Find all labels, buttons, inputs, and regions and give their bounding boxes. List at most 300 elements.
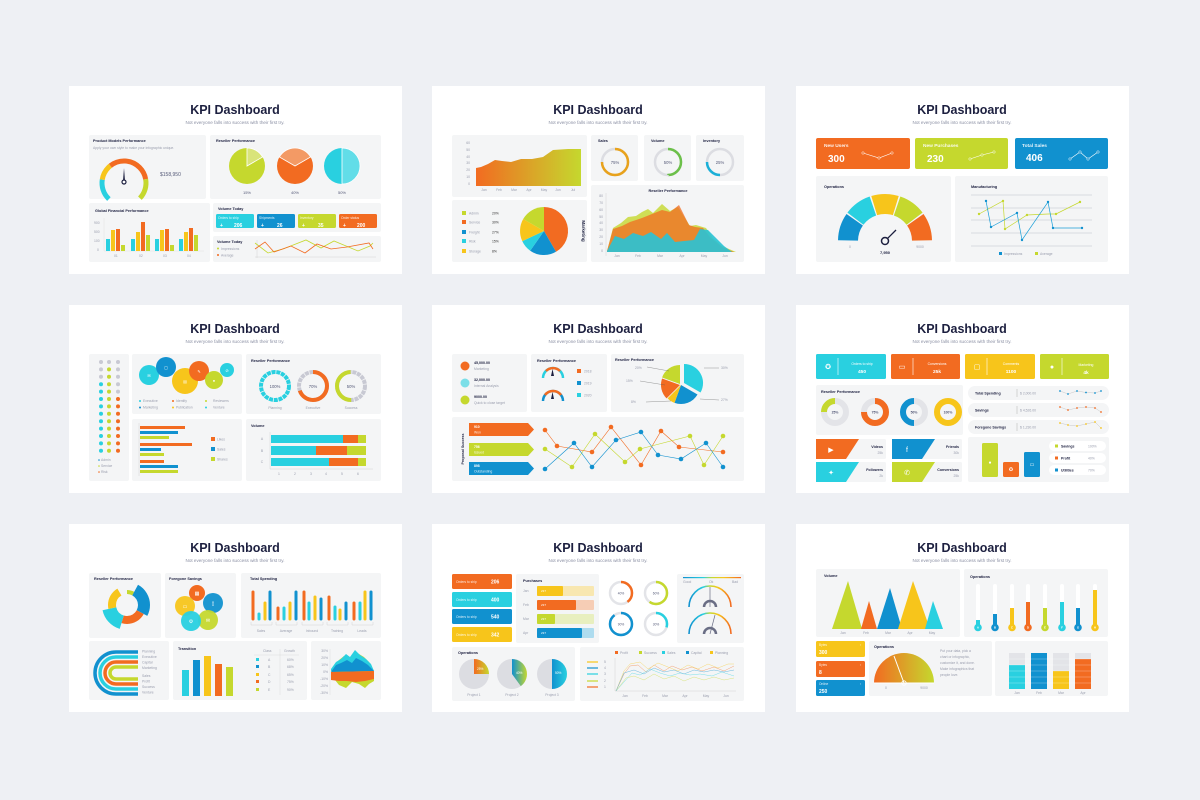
panel: horizontal bars: Shares: [217, 458, 228, 462]
panel: reseller performance donuts: 50%: [911, 410, 917, 414]
panel: reseller performance area chart: 40: [599, 221, 603, 225]
panel: reseller gauges: 2019: [584, 382, 592, 386]
panel: volume donut: 50%: [664, 160, 672, 165]
panel: savings bars and legend: 40%: [1088, 456, 1095, 460]
panel: good/bad gauges: Bad: [732, 580, 738, 584]
social tiles: 25k: [878, 451, 883, 455]
panel: volume today boxes: Shipments: [259, 216, 275, 220]
social tiles: 30k: [954, 451, 959, 455]
order cards: 206: [491, 580, 500, 586]
panel: savings bars and legend: ✪: [1009, 467, 1013, 473]
order cards: Orders to ship: [456, 580, 477, 584]
panel: foregone savings bubbles: ✉: [206, 618, 210, 624]
subtitle: Not everyone falls into success with their first try.: [186, 558, 284, 563]
panel: foregone savings bubbles: ▭: [183, 604, 188, 610]
panel: volume stacked bars: A: [261, 437, 264, 441]
panel: reseller performance rings: Executive: [306, 406, 320, 410]
slide 6: social KPI cards: [796, 305, 1129, 493]
panel: operations gauge: Make infographics that: [940, 667, 974, 671]
panel: monthly stacked bars: [995, 641, 1108, 696]
slide 5: icons, gauges, pie, proposal success: [432, 305, 765, 493]
panel: area chart: May: [541, 188, 548, 192]
panel: rainbow bands: [89, 641, 169, 700]
panel: purchases: Jan: [523, 589, 529, 593]
panel: volume triangles: Jan: [840, 631, 846, 635]
panel: volume today boxes: 200: [357, 223, 366, 229]
panel: reseller performance donuts: 75%: [872, 410, 878, 414]
panel: area chart: Jan: [481, 188, 487, 192]
panel: proposal success: 756: [474, 445, 480, 449]
panel: volume triangles: Feb: [863, 631, 869, 635]
panel: multi-line chart: 2: [604, 679, 606, 683]
panel: reseller performance area chart: May: [701, 254, 708, 258]
panel: proposal success: Proposal Success: [461, 434, 465, 464]
spending pills: Savings: [975, 408, 989, 412]
slide 4: dots, bubbles, rings, bars: [69, 305, 402, 493]
panel: purchases: 237: [541, 631, 546, 635]
panel: purchases: Feb: [523, 603, 529, 607]
panel: proposal success: Won: [474, 430, 481, 434]
panel: volume today boxes: 206: [234, 223, 243, 229]
panel: purchases: Mar: [523, 617, 530, 621]
panel: marketing pie: 8%: [492, 250, 497, 254]
panel: volume triangles: Volume: [824, 574, 837, 578]
panel: reseller performance pies: Reseller Performance: [216, 139, 255, 143]
panel: bubbles: ✎: [197, 369, 201, 374]
slide 8: order cards, purchases, donuts, gauges, operations: [432, 524, 765, 712]
panel: transition bars and table: 60%: [287, 658, 294, 662]
panel: marketing pie: Marketing: [581, 220, 586, 242]
subtitle: Not everyone falls into success with their first try.: [549, 120, 647, 125]
donuts: 90%: [618, 622, 624, 626]
spending pills: $ 2,000.00: [1020, 392, 1036, 396]
panel: operations gauge: Put your data, pick a: [940, 649, 971, 653]
panel: proposal success: 898: [474, 464, 480, 468]
panel: transition bars and table: C: [268, 673, 271, 677]
panel: transition bars and table: 65%: [287, 673, 294, 677]
panel: reseller performance rings: Reseller Performance: [251, 359, 290, 363]
social tiles: Followers: [866, 468, 883, 472]
panel: rainbow bands: Venture: [142, 690, 154, 694]
panel: operations thermometers: H: [1094, 626, 1096, 630]
panel: global financial performance bars: 04: [187, 254, 191, 258]
panel: reseller performance area chart: 60: [599, 208, 603, 212]
subtitle: Not everyone falls into success with their first try.: [549, 558, 647, 563]
panel: bubbles: Reviewers: [213, 399, 229, 403]
panel: reseller performance rings: Success: [345, 406, 358, 410]
panel: total spending bars: Sales: [257, 629, 266, 633]
card: new users: [816, 138, 910, 169]
panel: reseller performance area chart: Jan: [614, 254, 620, 258]
subtitle: Not everyone falls into success with their first try.: [186, 120, 284, 125]
panel: reseller performance area chart: 10: [599, 242, 603, 246]
card: total sales: Total Sales: [1022, 143, 1047, 149]
panel: proposal success: Outstanding: [474, 470, 492, 474]
panel: area chart: Jun: [555, 188, 561, 192]
panel: operations pies: Project 2: [505, 693, 519, 697]
panel: operations pies: Project 3: [545, 693, 559, 697]
side cards: [816, 641, 865, 696]
panel: reseller performance rings: 70%: [309, 384, 317, 389]
panel: volume stacked bars: 1: [278, 472, 280, 476]
panel: reseller performance donuts: 100%: [944, 410, 952, 414]
side cards: 250: [819, 689, 828, 695]
panel: reseller performance area chart: Jun: [722, 254, 728, 258]
panel: sales donut: 75%: [611, 160, 619, 165]
donuts: 30%: [653, 622, 659, 626]
social tiles: [816, 439, 962, 482]
social tiles: Friends: [946, 445, 959, 449]
subtitle: Not everyone falls into success with their first try.: [549, 339, 647, 344]
social tiles: 25k: [954, 474, 959, 478]
panel: volume triangles: Apr: [907, 631, 914, 635]
panel: bubbles: Identify: [176, 399, 187, 403]
social tiles: ✦: [828, 469, 834, 477]
panel: volume today boxes: 35: [318, 223, 324, 229]
panel: volume today boxes: 26: [277, 223, 283, 229]
panel: volume stacked bars: 5: [341, 472, 343, 476]
panel: multi-line chart: Feb: [642, 694, 648, 698]
panel: volume today boxes: +: [302, 223, 305, 229]
spending pills: [968, 386, 1109, 434]
panel: rainbow bands: Planning: [142, 650, 155, 654]
panel: volume stacked bars: C: [261, 460, 264, 464]
panel: operations gauge: 0: [885, 686, 887, 690]
panel: rainbow bands: Capital: [142, 660, 153, 664]
panel: operations gauge: Operations: [824, 185, 844, 189]
panel: area chart: Apr: [526, 188, 533, 192]
panel: volume today boxes: +: [220, 223, 223, 229]
panel: volume today boxes: +: [261, 223, 264, 229]
spending pills: $ 4,526.00: [1020, 408, 1036, 412]
subtitle: Not everyone falls into success with their first try.: [913, 120, 1011, 125]
cards row: Comments: [1003, 362, 1019, 366]
panel: marketing pie: 27%: [492, 230, 499, 234]
panel: global financial performance bars: 01: [114, 254, 118, 258]
donuts: 40%: [618, 592, 624, 596]
panel: multi-line chart: Apr: [682, 694, 689, 698]
panel: horizontal bars: Likes: [217, 438, 225, 442]
social tiles: Conversions: [937, 468, 959, 472]
panel: transition bars and table: D: [268, 680, 271, 684]
panel: reseller pie: 15%: [626, 379, 633, 383]
panel: bubbles: Executive: [143, 399, 158, 403]
panel: marketing pie: 15%: [492, 240, 499, 244]
panel: marketing pie: 20%: [492, 212, 499, 216]
panel: reseller performance rings: Planning: [268, 406, 282, 410]
panel: operations pies: 50%: [555, 671, 562, 675]
panel: area chart: Feb: [496, 188, 502, 192]
panel: reseller performance pies: 50%: [338, 190, 346, 195]
panel: multi-line chart: May: [703, 694, 710, 698]
panel: reseller gauges: [531, 354, 607, 412]
panel: sales donut: [591, 135, 638, 181]
panel: operations gauge: 9000: [920, 686, 928, 690]
slide 1: gauges, pies, bars: [69, 86, 402, 274]
panel: reseller performance area chart: 70: [599, 201, 603, 205]
panel: total spending bars: Total Spending: [250, 577, 278, 581]
panel: inventory donut: Inventory: [703, 139, 721, 143]
cards row: ▢: [974, 364, 980, 371]
panel: volume today boxes: Order status: [341, 216, 359, 220]
panel: volume donut: Volume: [651, 139, 664, 143]
panel: area chart: Mar: [511, 188, 518, 192]
panel: operations thermometers: D: [1027, 626, 1030, 630]
panel: multi-line chart: Sales: [667, 651, 676, 655]
panel: operations pies: Project 1: [467, 693, 481, 697]
spending pills: Total Spending: [975, 392, 1001, 396]
panel: multi-line chart: Planning: [715, 651, 728, 655]
panel: bubbles: ▤: [183, 379, 187, 384]
panel: foregone savings bubbles: ▦: [195, 591, 200, 597]
side cards: 8: [819, 670, 822, 676]
panel: operations thermometers: [964, 569, 1108, 637]
title: KPI Dashboard: [190, 541, 280, 555]
panel: area chart: 50: [466, 148, 470, 152]
panel: manufacturing line chart: Average: [1040, 252, 1053, 256]
panel: product models performance: Apply your own style to make your infographic unique.: [93, 146, 174, 150]
panel: volume stacked bars: 6: [357, 472, 359, 476]
panel: operations thermometers: C: [1011, 626, 1014, 630]
panel: area chart: 10: [466, 175, 470, 179]
panel: area chart: Jul: [571, 188, 575, 192]
panel: multi-line chart: Jun: [723, 694, 729, 698]
cards row: 1100: [1006, 369, 1017, 375]
panel: global financial performance bars: 0: [97, 248, 99, 252]
panel: reseller pie: 8%: [631, 400, 636, 404]
panel: global financial performance bars: 500: [94, 230, 100, 234]
panel: operations thermometers: Operations: [970, 575, 990, 579]
cards row: ▭: [899, 364, 905, 371]
panel: reseller performance area chart: [591, 185, 744, 262]
card: total sales: 406: [1026, 153, 1043, 164]
panel: inventory donut: [696, 135, 744, 181]
panel: rainbow bands: Executive: [142, 655, 157, 659]
panel: key figures: 32,000.00: [474, 378, 490, 382]
panel: growth area: -10%: [320, 677, 328, 681]
title: KPI Dashboard: [190, 103, 280, 117]
panel: growth area: 30%: [321, 649, 328, 653]
title: KPI Dashboard: [553, 103, 643, 117]
panel: reseller performance pies: [210, 135, 381, 199]
panel: foregone savings bubbles: ▯: [212, 601, 215, 607]
title: KPI Dashboard: [553, 322, 643, 336]
panel: growth area: -30%: [320, 691, 328, 695]
panel: transition bars and table: Transition: [178, 647, 197, 651]
panel: reseller pie: [611, 354, 744, 412]
subtitle: Not everyone falls into success with their first try.: [913, 339, 1011, 344]
social tiles: f: [906, 447, 908, 454]
cards row: 25k: [933, 369, 941, 375]
panel: volume today line chart: Average: [221, 254, 234, 258]
panel: product models performance: $158,950: [160, 172, 181, 178]
panel: purchases: Apr: [523, 631, 529, 635]
title: KPI Dashboard: [917, 103, 1007, 117]
social tiles: ✆: [904, 469, 910, 477]
panel: growth area: -20%: [320, 684, 328, 688]
slide 2: area charts, donuts, pie: [432, 86, 765, 274]
panel: bubbles: ▢: [164, 365, 168, 370]
panel: operations gauge: 0: [849, 245, 851, 249]
panel: purchases: 237: [541, 603, 546, 607]
panel: total spending bars: Leads: [357, 629, 367, 633]
panel: reseller performance rings: [246, 354, 381, 414]
panel: operations thermometers: A: [977, 626, 980, 630]
panel: transition bars and table: 75%: [287, 680, 294, 684]
side cards: ⁝: [860, 682, 861, 686]
panel: horizontal bars: [132, 419, 242, 481]
panel: operations gauge: 9000: [916, 245, 924, 249]
panel: dot matrix: [89, 354, 129, 481]
panel: global financial performance bars: Global Financial Performance: [95, 209, 149, 213]
side cards: Bytes: [819, 663, 827, 667]
panel: reseller pie: 20%: [635, 366, 642, 370]
panel: savings bars and legend: ●: [988, 460, 992, 466]
side cards: ⁝: [860, 663, 861, 667]
panel: reseller performance area chart: Apr: [679, 254, 686, 258]
panel: operations gauge: 7,950: [880, 250, 891, 255]
panel: operations gauge: [869, 641, 992, 696]
panel: area chart: 40: [466, 155, 470, 159]
panel: reseller performance pies: 15%: [243, 190, 251, 195]
panel: purchases: Purchases: [523, 579, 542, 583]
panel: volume today boxes: Orders to ship: [218, 216, 239, 220]
panel: volume today line chart: [213, 236, 381, 262]
social tiles: Videos: [871, 445, 883, 449]
panel: marketing pie: Freight: [469, 230, 480, 234]
panel: monthly stacked bars: Jan: [1014, 691, 1020, 695]
panel: area chart: [452, 135, 587, 197]
panel: volume stacked bars: B: [261, 449, 264, 453]
panel: volume triangles: [816, 569, 960, 637]
panel: multi-line chart: Mar: [662, 694, 669, 698]
spending pills: $ 1,230.00: [1020, 426, 1036, 430]
panel: dot matrix: Service: [101, 464, 112, 468]
panel: volume triangles: Mar: [885, 631, 892, 635]
order cards: 342: [491, 632, 500, 638]
panel: volume stacked bars: 4: [325, 472, 327, 476]
panel: reseller performance segmented donut: Reseller Performance: [94, 577, 133, 581]
panel: growth area: 20%: [321, 656, 328, 660]
panel: manufacturing line chart: Manufacturing: [971, 185, 998, 189]
panel: reseller performance area chart: 20: [599, 235, 603, 239]
card: new purchases: [915, 138, 1008, 169]
panel: operations thermometers: E: [1044, 626, 1046, 630]
panel: horizontal bars: Sales: [217, 448, 226, 452]
panel: savings bars and legend: 100%: [1088, 444, 1097, 448]
panel: reseller performance area chart: 50: [599, 215, 603, 219]
panel: reseller gauges: Reseller Performance: [537, 359, 576, 363]
panel: bubbles: [132, 354, 242, 414]
panel: multi-line chart: 4: [604, 666, 606, 670]
panel: manufacturing line chart: [955, 176, 1108, 262]
panel: savings bars and legend: Utilities: [1061, 468, 1074, 472]
panel: transition bars and table: Growth: [284, 649, 295, 653]
panel: manufacturing line chart: Impressions: [1004, 252, 1023, 256]
title: KPI Dashboard: [917, 322, 1007, 336]
panel: volume today boxes: Volume Today: [218, 207, 244, 211]
panel: rainbow bands: Sales: [142, 674, 151, 678]
panel: operations gauge: chart or infographic,: [940, 655, 970, 659]
panel: proposal success: 910: [474, 425, 480, 429]
panel: marketing pie: Admin: [469, 212, 479, 216]
title: KPI Dashboard: [190, 322, 280, 336]
panel: good/bad gauges: [677, 574, 744, 643]
title: KPI Dashboard: [553, 541, 643, 555]
panel: bubbles: ⊘: [225, 368, 229, 373]
cards row: Orders to ship: [851, 362, 873, 366]
panel: operations gauge: [816, 176, 951, 262]
spending pills: Foregone Savings: [975, 426, 1006, 430]
panel: reseller gauges: 2020: [584, 394, 592, 398]
panel: growth area: 0%: [323, 670, 328, 674]
panel: reseller performance rings: 100%: [270, 384, 281, 389]
panel: volume donut: [644, 135, 691, 181]
panel: product models performance: Product Models Performance: [93, 139, 146, 143]
panel: operations pies: Operations: [458, 651, 478, 655]
panel: savings bars and legend: 70%: [1088, 468, 1095, 472]
cards row: ✪: [825, 363, 831, 371]
panel: reseller pie: 30%: [721, 366, 728, 370]
panel: key figures: Internal Analysis: [474, 384, 499, 388]
panel: multi-line chart: Success: [644, 651, 657, 655]
panel: transition bars and table: 68%: [287, 665, 294, 669]
panel: reseller performance rings: 50%: [347, 384, 355, 389]
panel: monthly stacked bars: Apr: [1080, 691, 1087, 695]
panel: total spending bars: [241, 573, 381, 638]
panel: multi-line chart: Capital: [691, 651, 702, 655]
panel: total spending bars: Average: [280, 629, 292, 633]
panel: growth area: 10%: [321, 663, 328, 667]
panel: marketing pie: 30%: [492, 220, 499, 224]
panel: purchases: 237: [541, 589, 546, 593]
panel: key figures: 45,000.00: [474, 361, 490, 365]
panel: savings bars and legend: [968, 437, 1109, 482]
panel: foregone savings bubbles: ⚙: [189, 619, 194, 625]
panel: global financial performance bars: [89, 203, 210, 262]
panel: transition bars and table: [173, 641, 307, 700]
panel: marketing pie: Service: [469, 220, 480, 224]
card: new users: New Users: [824, 143, 849, 149]
cards row: ●: [1050, 364, 1054, 371]
order cards: 400: [491, 598, 500, 604]
panel: product models performance: [89, 135, 206, 214]
panel: bubbles: Marketing: [143, 406, 158, 410]
panel: savings bars and legend: Profit: [1061, 456, 1071, 460]
panel: reseller performance donuts: 25%: [832, 410, 838, 414]
slide 3: KPI cards, operations gauge, manufacturing: [796, 86, 1129, 274]
panel: rainbow bands: Marketing: [142, 666, 157, 670]
panel: bubbles: ✉: [147, 373, 151, 378]
panel: reseller performance pies: 40%: [291, 190, 299, 195]
panel: global financial performance bars: 03: [163, 254, 167, 258]
panel: rainbow bands: Profit: [142, 680, 150, 684]
panel: volume today boxes: Inventory: [300, 216, 314, 220]
title: KPI Dashboard: [917, 541, 1007, 555]
social tiles: 2k: [879, 474, 883, 478]
social tiles: ▶: [828, 447, 834, 454]
panel: savings bars and legend: Savings: [1061, 444, 1074, 448]
panel: key figures: Quick to close target: [474, 401, 505, 405]
panel: multi-line chart: Profit: [620, 651, 628, 655]
panel: operations pies: 25%: [477, 667, 484, 671]
panel: area chart: 30: [466, 161, 470, 165]
panel: key figures: Marketing: [474, 367, 489, 371]
panel: reseller performance segmented donut: [89, 573, 161, 638]
order cards: Orders to ship: [456, 615, 477, 619]
card: total sales: [1015, 138, 1108, 169]
panel: marketing pie: [452, 200, 587, 262]
